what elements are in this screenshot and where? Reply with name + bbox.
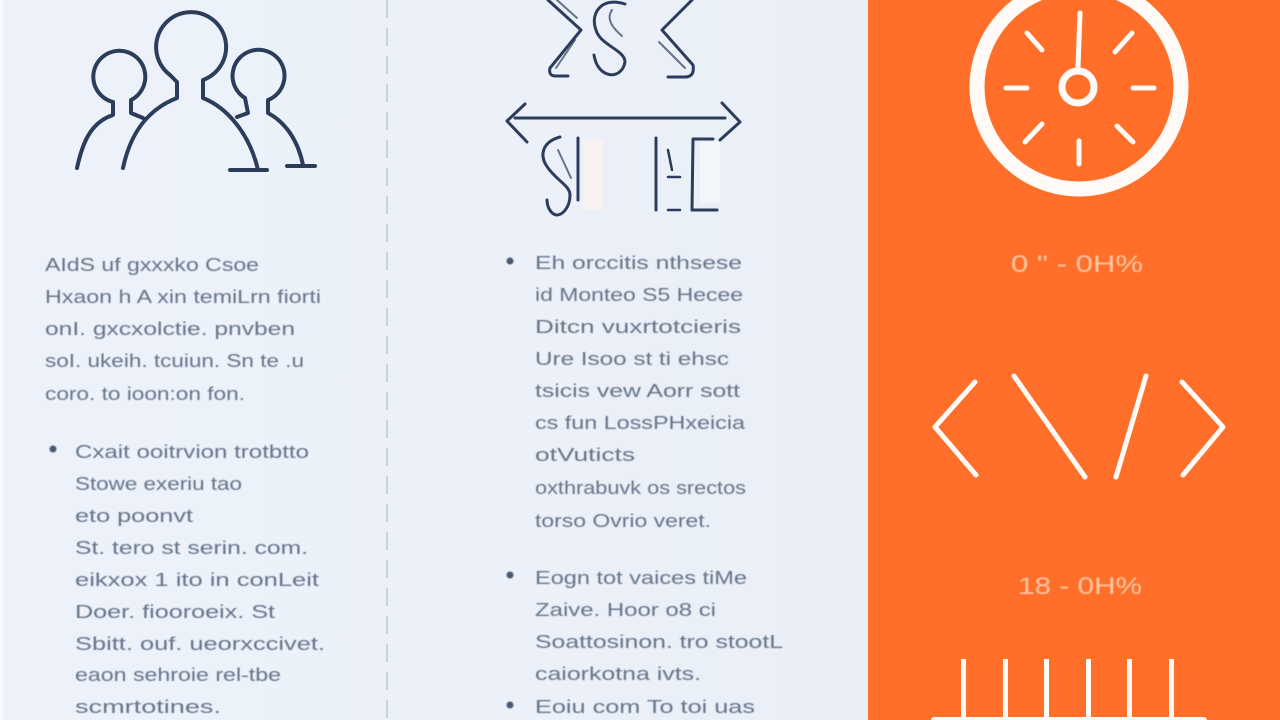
text block: left intro paragraph: soI. ukeih. tcuiun. Sn te .u	[45, 351, 304, 371]
text block: left bullet: eaon sehroie rel-tbe	[75, 665, 281, 685]
text block: middle first bullet	[506, 253, 746, 531]
text block: middle first bullet: otVuticts	[535, 445, 635, 465]
panel: light background	[0, 0, 868, 720]
label: first orange range: 0 " - 0H%	[1011, 251, 1143, 278]
text block: left bullet: Cxait ooitrvion trotbtto	[75, 442, 309, 462]
text block: left intro paragraph: coro. to ioon:on fon.	[45, 384, 245, 404]
text block: middle first bullet: id Monteo S5 Hecee	[535, 285, 743, 305]
text block: left bullet: Doer. fiooroeix. St	[75, 602, 275, 622]
text block: left bullet: scmrtotines.	[75, 697, 221, 717]
text block: left intro paragraph: AIdS uf gxxxko Csoe	[45, 255, 259, 275]
icon: clock	[977, 0, 1181, 189]
text block: left bullet: eikxox 1 ito in conLeit	[75, 570, 319, 590]
text block: left intro paragraph: Hxaon h A xin temiLrn fiorti	[45, 287, 321, 307]
text block: middle first bullet: Eh orccitis nthsese	[535, 253, 742, 273]
icon: group of people	[77, 12, 315, 170]
icon: comb bars	[931, 659, 1207, 720]
text block: left bullet: eto poonvt	[75, 506, 193, 526]
text block: middle first bullet: torso Ovrio veret.	[535, 511, 711, 531]
text block: middle first bullet: Ditcn vuxrtotcieris	[535, 317, 741, 337]
text block: middle second bullet: Eogn tot vaices tiMe	[535, 568, 747, 588]
icon: abstract arrows and shapes	[507, 0, 740, 215]
text block: middle third bullet: Eoiu com To toi uas	[535, 697, 755, 717]
text block: middle second bullet: Soattosinon. tro stootL	[535, 632, 783, 652]
text block: left bullet: Sbitt. ouf. ueorxccivet.	[75, 634, 325, 654]
icon: code brackets	[935, 376, 1223, 477]
text block: middle first bullet: oxthrabuvk os srectos	[535, 478, 746, 498]
text block: left intro paragraph	[45, 255, 321, 404]
text block: left bullet	[50, 442, 325, 717]
text block: middle first bullet: Ure Isoo st ti ehsc	[535, 349, 729, 369]
panel: orange column	[868, 0, 1280, 720]
label: second orange range: 18 - 0H%	[1018, 573, 1142, 600]
text block: left bullet: St. tero st serin. com.	[75, 538, 308, 558]
text block: middle second bullet: caiorkotna ivts.	[535, 664, 701, 684]
text block: middle first bullet: cs fun LossPHxeicia	[535, 413, 746, 433]
text block: left bullet: Stowe exeriu tao	[75, 474, 242, 494]
text block: left intro paragraph: onI. gxcxolctie. pnvben	[45, 319, 295, 339]
text block: middle third bullet	[506, 697, 755, 717]
text block: middle second bullet: Zaive. Hoor o8 ci	[535, 600, 716, 620]
text block: middle first bullet: tsicis vew Aorr sott	[535, 381, 740, 401]
text block: middle second bullet	[506, 568, 783, 684]
